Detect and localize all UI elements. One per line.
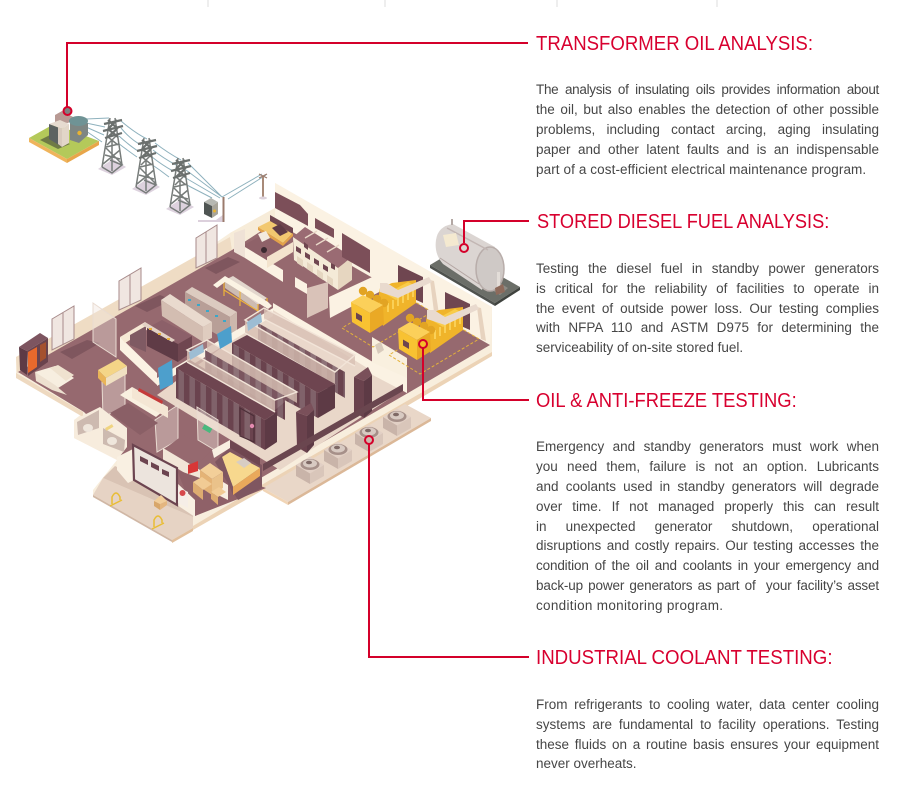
office upper room — [240, 215, 297, 268]
vending machine — [19, 333, 48, 376]
callout line: transformer oil — [64, 43, 528, 115]
rack aisle door with flower — [240, 408, 254, 442]
server row D — [258, 323, 345, 398]
loading dock door — [133, 445, 177, 505]
coolers — [296, 456, 324, 484]
glass enclosure right — [245, 308, 355, 385]
text block: stored diesel fuel analysis: the event of outside power loss. Our testing complies — [536, 300, 879, 316]
battery shelves — [213, 276, 272, 313]
blue doors — [158, 326, 232, 390]
text block: oil and anti-freeze testing — [536, 439, 880, 613]
stacked cartons — [193, 463, 226, 505]
text block: oil and anti-freeze testing: and coolants used in standby generators will degrade — [536, 479, 879, 494]
heading: industrial coolant testing: INDUSTRIAL COOLANT TESTING: — [536, 647, 833, 669]
light battery cabinets — [161, 294, 212, 342]
transmission tower 2 — [132, 138, 160, 195]
office walls — [234, 229, 293, 282]
exit sign — [202, 424, 212, 433]
server room tile floor — [157, 310, 403, 470]
text block: stored diesel fuel analysis: serviceability of on-site stored fuel. — [536, 340, 743, 355]
pole transformer — [198, 197, 224, 222]
text block: transformer oil analysis: The analysis of insulating oils provides information about — [536, 82, 879, 97]
glass enclosure left — [187, 340, 297, 412]
server hall slat edge — [263, 384, 403, 471]
text block: oil and anti-freeze testing: disruptions and costly repairs. Our testing accesses the — [536, 538, 879, 553]
bollards — [110, 493, 164, 529]
wall fixture — [375, 342, 384, 354]
electrical cabinets room — [293, 227, 352, 290]
base edge — [16, 352, 492, 530]
text block: oil and anti-freeze testing: in unexpected generator shutdown, operational — [536, 518, 879, 534]
coolers 2 — [324, 442, 352, 469]
substation on green plot — [29, 111, 99, 163]
server hall walls — [157, 308, 407, 393]
text block: industrial coolant testing — [536, 697, 879, 771]
wall beside dock door — [117, 449, 195, 517]
building shell — [16, 183, 492, 540]
door floor shadows — [60, 257, 240, 359]
generator 1 — [342, 265, 439, 347]
text block: transformer oil analysis: part of a cost-efficient electrical maintenance program. — [536, 162, 866, 177]
text block: industrial coolant testing: From refrigerants to cooling water, data center cooling — [536, 697, 879, 712]
loading bay back room floor — [163, 435, 212, 462]
battery room wall and units — [120, 320, 192, 385]
small office — [212, 440, 262, 500]
wall dividers — [273, 272, 407, 393]
callout line: industrial coolant — [365, 436, 529, 657]
sofa — [35, 365, 74, 395]
generator 2 — [389, 292, 486, 374]
text block: oil and anti-freeze testing: condition monitoring program. — [536, 598, 723, 613]
hallway floor — [110, 403, 158, 435]
back walls — [16, 183, 492, 373]
heading: oil and anti-freeze testing: OIL & ANTI-FREEZE TESTING: — [536, 390, 797, 412]
callout line: oil and anti-freeze — [419, 340, 529, 400]
text block: transformer oil analysis: the oil, but also enables the detection of other possible — [536, 102, 879, 117]
heading: transformer oil analysis: TRANSFORMER OIL ANALYSIS: — [536, 33, 813, 55]
cooler platform — [263, 404, 431, 505]
coolers 4 — [383, 408, 411, 436]
text block: transformer oil analysis: problems, including contact arcing, aging insulating — [536, 122, 879, 137]
text block: oil and anti-freeze testing: over time. If not managed properly this can result — [536, 499, 879, 514]
heading: stored diesel fuel analysis: STORED DIESEL FUEL ANALYSIS: — [537, 211, 829, 233]
server row A — [176, 360, 277, 450]
main floor — [18, 222, 490, 516]
utility pole — [259, 174, 267, 200]
tall server cabinets — [296, 367, 372, 453]
text block: oil and anti-freeze testing: condition of the oil and coolants in your emergency and — [536, 558, 879, 573]
coolers 3 — [355, 424, 383, 452]
text block: industrial coolant testing: these fluids on a routine basis ensures your equipment — [536, 736, 879, 752]
text block: transformer oil analysis — [536, 82, 880, 177]
text block: stored diesel fuel analysis: with NFPA 110 and ASTM D975 for determining the — [536, 320, 879, 335]
reception desk — [98, 359, 127, 386]
text block: stored diesel fuel analysis: Testing the diesel fuel in standby power generators — [536, 261, 879, 276]
cream partition and red panel — [120, 387, 168, 418]
dock box — [154, 495, 167, 510]
server row B — [205, 350, 285, 420]
text block: stored diesel fuel analysis — [536, 261, 879, 355]
callout line: stored diesel — [460, 221, 529, 252]
transmission tower 1 — [98, 118, 126, 175]
UPS cabinets — [185, 287, 237, 342]
wall panels — [275, 192, 370, 273]
loading bay floor — [177, 470, 266, 516]
text block: industrial coolant testing: never overheats. — [536, 756, 637, 771]
transmission tower 3 — [166, 158, 194, 215]
warning signs — [178, 461, 198, 508]
loading dock steps — [93, 466, 195, 543]
glass doors — [93, 303, 218, 452]
power lines — [86, 118, 266, 199]
text block: oil and anti-freeze testing: back-up power generators as part of your facility’s asset — [536, 578, 879, 593]
faint top marks — [207, 0, 718, 7]
diesel storage tank — [430, 219, 520, 306]
server row C — [232, 335, 335, 418]
text block: industrial coolant testing: systems are fundamental to facility operations. Testing — [536, 717, 879, 732]
loading bay wall — [163, 448, 200, 482]
text block: stored diesel fuel analysis: is critical for the reliability of facilities to operate in — [536, 281, 879, 296]
text block: oil and anti-freeze testing: you need them, failure is not an option. Lubricants — [536, 459, 879, 474]
wood doors — [52, 225, 217, 350]
door dividers — [63, 232, 206, 345]
text block: transformer oil analysis: paper and other latent faults and is an indispensable — [536, 142, 879, 157]
restrooms — [74, 407, 127, 460]
text block: oil and anti-freeze testing: Emergency and standby generators must work when — [536, 439, 879, 454]
